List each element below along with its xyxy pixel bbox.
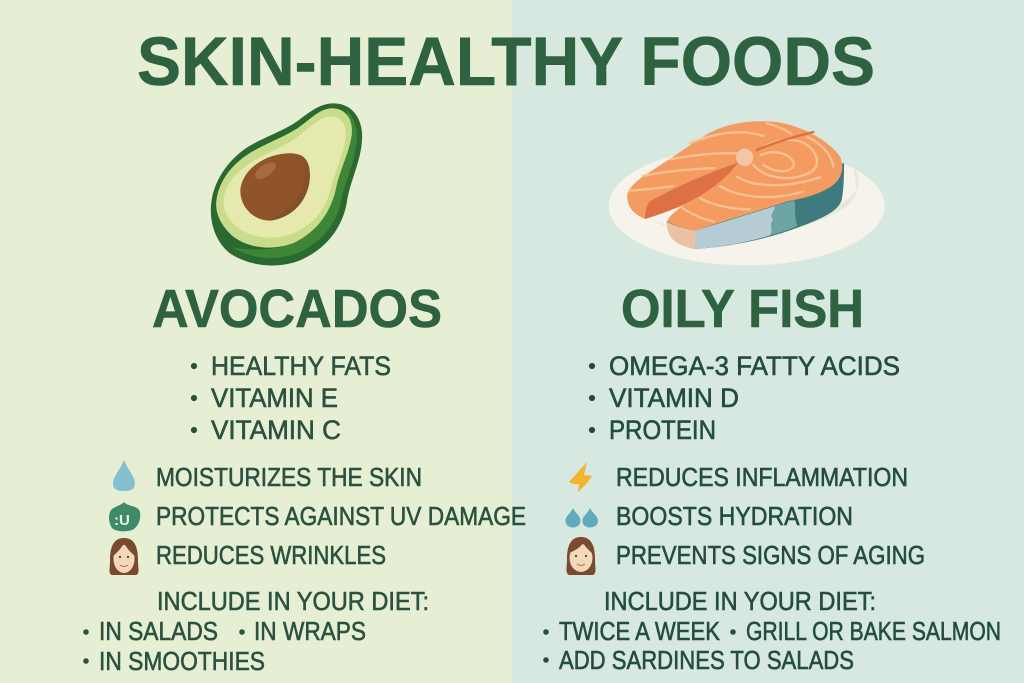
benefit: moisturizes: MOISTURIZES THE SKIN <box>156 462 422 492</box>
icon: lightning bolt <box>569 462 592 492</box>
list: avocado nutrients: VITAMIN E <box>211 383 338 413</box>
benefit: UV: PROTECTS AGAINST UV DAMAGE <box>156 501 526 531</box>
diet tips: oily fish <box>544 586 1001 675</box>
list: fish nutrients: PROTEIN <box>609 415 716 445</box>
icon: water drop <box>113 460 135 491</box>
panel: avocados background <box>0 0 512 683</box>
benefit: hydration: BOOSTS HYDRATION <box>616 501 853 531</box>
list: avocado nutrients: HEALTHY FATS <box>211 351 391 381</box>
diet tips: oily fish: INCLUDE IN YOUR DIET: <box>604 586 876 616</box>
icon: avocado <box>211 103 362 265</box>
diet tips: oily fish: TWICE A WEEK <box>559 616 721 646</box>
diet tips: avocados <box>84 586 429 676</box>
icon: woman face <box>110 538 138 575</box>
title: SKIN-HEALTHY FOODS <box>137 23 875 100</box>
list: fish nutrients <box>589 351 900 445</box>
diet tips: avocados: INCLUDE IN YOUR DIET: <box>157 586 429 616</box>
diet tips: avocados: IN WRAPS <box>254 616 366 646</box>
diet tips: oily fish: ADD SARDINES TO SALADS <box>559 645 854 675</box>
heading: avocados: AVOCADOS <box>152 279 442 339</box>
icon: UV shield <box>109 502 140 531</box>
icon: UV shield: :U <box>114 512 130 529</box>
icon: salmon steak on plate <box>609 121 885 265</box>
heading: oily fish: OILY FISH <box>621 279 864 339</box>
panel: oily fish background <box>512 0 1024 683</box>
list: avocado nutrients: VITAMIN C <box>211 415 341 445</box>
list: fish nutrients: OMEGA-3 FATTY ACIDS <box>609 351 900 381</box>
benefit: inflammation: REDUCES INFLAMMATION <box>616 462 908 492</box>
diet tips: avocados: IN SMOOTHIES <box>99 646 265 676</box>
icon: two water drops <box>566 508 598 528</box>
list: avocado nutrients <box>191 351 391 445</box>
benefit: wrinkles: REDUCES WRINKLES <box>156 540 386 570</box>
benefit: aging: PREVENTS SIGNS OF AGING <box>616 540 925 570</box>
list: fish nutrients: VITAMIN D <box>609 383 739 413</box>
icon: woman face <box>566 537 596 575</box>
diet tips: avocados: IN SALADS <box>99 616 218 646</box>
